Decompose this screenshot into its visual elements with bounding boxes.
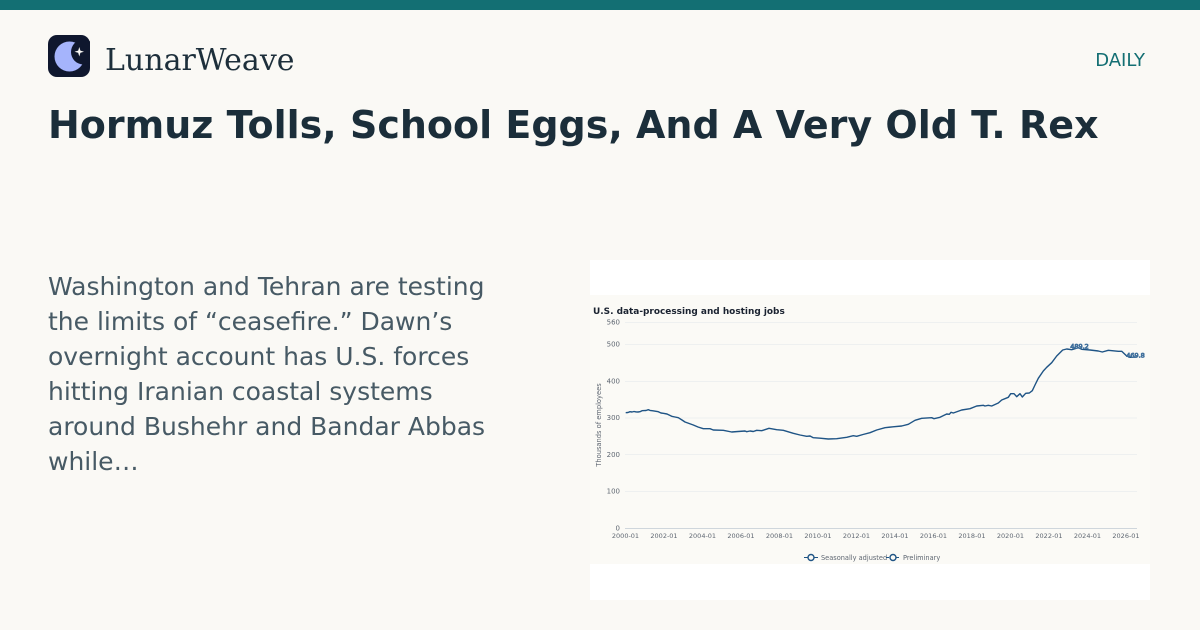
y axis labels: 500 bbox=[607, 340, 620, 348]
category label: DAILY bbox=[1095, 50, 1145, 71]
y axis title: Thousands of employees bbox=[595, 383, 603, 468]
data label: latest: 469.8 bbox=[1126, 352, 1145, 360]
y axis labels: 400 bbox=[607, 378, 620, 386]
summary text: while… bbox=[48, 447, 139, 476]
y axis labels: 200 bbox=[607, 451, 620, 459]
panel: chart image bbox=[590, 260, 1150, 600]
data line: seasonally adjusted bbox=[626, 348, 1137, 439]
y axis labels: 100 bbox=[607, 488, 620, 496]
x axis labels: 2010-01 bbox=[804, 532, 832, 540]
summary text: hitting Iranian coastal systems bbox=[48, 377, 433, 406]
brand name: LunarWeave bbox=[105, 43, 295, 78]
logo icon: crescent moon and star bbox=[48, 35, 90, 77]
x axis labels: 2026-01 bbox=[1112, 532, 1140, 540]
legend bbox=[804, 554, 940, 562]
summary text: Washington and Tehran are testing bbox=[48, 272, 485, 301]
x axis labels: 2016-01 bbox=[920, 532, 947, 540]
title: Hormuz Tolls, School Eggs, And A Very Old T. Rex bbox=[48, 103, 1099, 147]
top accent bar bbox=[0, 0, 1200, 10]
x axis labels: 2012-01 bbox=[843, 532, 870, 540]
y axis labels: 0 bbox=[616, 524, 620, 532]
y axis labels: 560 bbox=[607, 318, 620, 326]
y axis labels bbox=[607, 318, 620, 532]
x axis labels: 2022-01 bbox=[1035, 532, 1063, 540]
x axis labels: 2020-01 bbox=[997, 532, 1024, 540]
x axis labels: 2002-01 bbox=[650, 532, 678, 540]
y axis labels: 300 bbox=[607, 414, 620, 422]
data label: peak: 489.2 bbox=[1070, 342, 1089, 350]
summary text bbox=[48, 272, 485, 476]
summary text: overnight account has U.S. forces bbox=[48, 342, 469, 371]
x axis labels: 2014-01 bbox=[881, 532, 909, 540]
summary text: around Bushehr and Bandar Abbas bbox=[48, 412, 485, 441]
line chart: U.S. data-processing and hosting jobs bbox=[590, 295, 1150, 564]
legend: Preliminary bbox=[903, 554, 940, 562]
x axis labels: 2004-01 bbox=[689, 532, 716, 540]
x axis labels: 2000-01 bbox=[612, 532, 639, 540]
legend: Seasonally adjusted bbox=[821, 554, 887, 562]
summary text: the limits of “ceasefire.” Dawn’s bbox=[48, 307, 452, 336]
x axis labels: 2024-01 bbox=[1074, 532, 1101, 540]
x axis labels: 2018-01 bbox=[958, 532, 986, 540]
x axis labels: 2008-01 bbox=[766, 532, 793, 540]
x axis labels: 2006-01 bbox=[727, 532, 755, 540]
x axis labels bbox=[612, 532, 1140, 540]
chart title: U.S. data-processing and hosting jobs bbox=[593, 307, 785, 317]
